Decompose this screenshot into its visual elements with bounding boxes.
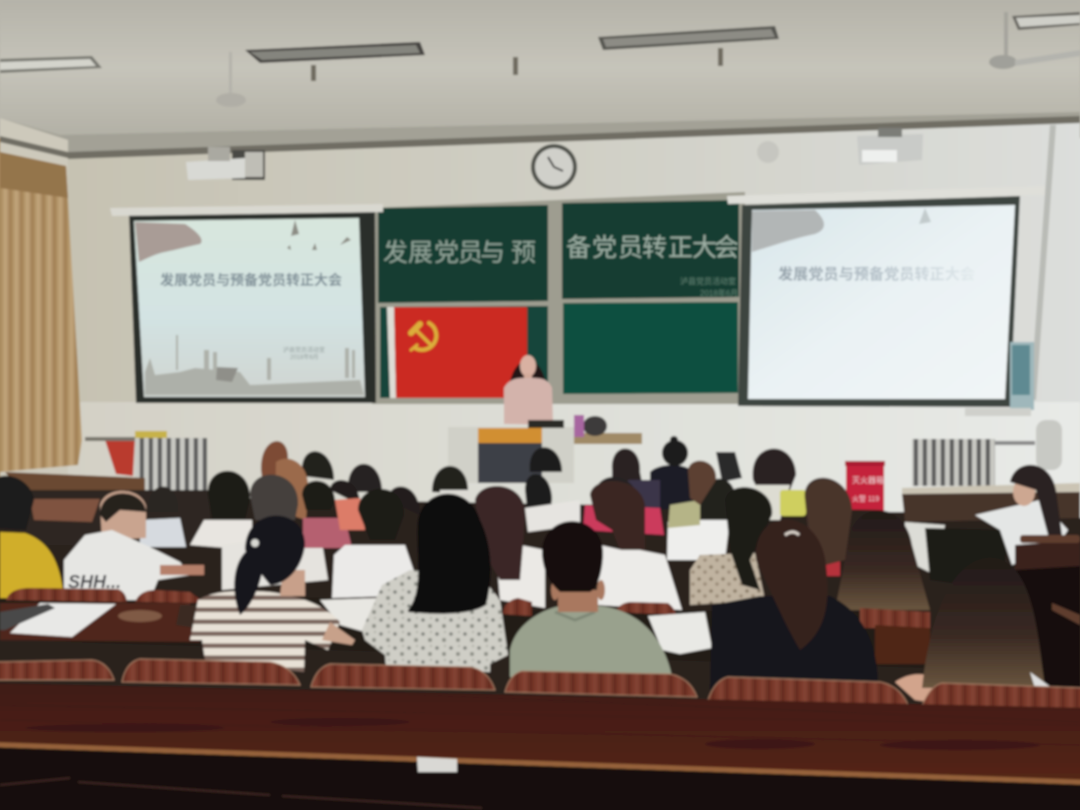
hammer and sickle emblem — [411, 323, 436, 350]
open book right — [648, 612, 712, 654]
cloud on screen — [135, 222, 202, 262]
party flag — [387, 307, 527, 398]
teacher — [504, 355, 553, 425]
under desk shadow — [0, 747, 1080, 810]
student: long brown hair — [820, 510, 930, 610]
fire extinguisher box — [845, 461, 885, 513]
chalkboard — [372, 192, 745, 404]
screen subtitle left: 2018年6月 — [290, 353, 319, 361]
side desks left back — [5, 472, 210, 545]
student back row 2 — [275, 436, 806, 520]
student: long hair front right — [895, 558, 1052, 705]
screen title right: 发展党员与预备党员转正大会 — [778, 265, 975, 283]
city skyline — [145, 335, 364, 395]
chalk title left: 发展党员与预 — [383, 239, 536, 267]
right projection screen — [738, 196, 1020, 407]
student: long black hair white shirt — [475, 486, 545, 608]
chalk note: 2018年6月 — [700, 288, 738, 298]
projector left — [186, 147, 265, 180]
birds on screen — [287, 220, 351, 250]
curtain — [0, 152, 82, 472]
bag on lectern — [574, 415, 607, 437]
student: floral blouse long hair — [362, 494, 508, 672]
student: right side white shirt — [975, 465, 1068, 565]
shirt print: SHH... — [68, 572, 121, 592]
front row chair backs — [0, 659, 1080, 710]
paper on desk — [10, 603, 116, 637]
side desk right front — [1015, 535, 1080, 690]
back wall — [0, 118, 1080, 512]
chalk title right: 备党员转正大会 — [566, 234, 739, 262]
chalk note: 泸县党员活动室 — [680, 276, 736, 286]
projector right — [857, 128, 923, 165]
lectern — [448, 415, 642, 483]
wall pipe — [0, 116, 1080, 470]
student: white shirt — [332, 489, 422, 598]
open book left — [320, 598, 378, 632]
student: white shirt ponytail — [590, 481, 682, 610]
left radiator — [85, 431, 207, 494]
student back row 3 — [140, 471, 420, 590]
back rows of students — [140, 436, 852, 590]
student: floral off-shoulder — [690, 487, 772, 605]
fire extinguisher box: 灭火器箱 — [852, 475, 884, 485]
screen top casings — [110, 186, 1045, 216]
wall clock — [531, 144, 577, 190]
screen title left: 发展党员与预备党员转正大会 — [160, 272, 342, 288]
front desk — [0, 683, 1080, 785]
student back row 1 — [261, 441, 470, 508]
ceiling lights — [0, 12, 1080, 81]
student: striped shirt ponytail — [190, 516, 355, 672]
second desk row back — [0, 596, 930, 668]
student: yellow shirt — [0, 476, 63, 598]
dark seating backdrop — [0, 492, 1080, 810]
student: SHH shirt — [64, 491, 204, 600]
screen subtitle left: 泸县党员活动室 — [283, 346, 325, 354]
ceiling fans — [216, 12, 1080, 107]
student: grey-green shirt — [510, 521, 672, 677]
student: dark top long brown hair — [710, 519, 878, 690]
chalk note — [680, 276, 738, 298]
fire extinguisher box: 火警 119 — [852, 494, 879, 503]
student back row 4 — [525, 461, 852, 565]
middle desks — [0, 598, 930, 664]
wall outlet — [757, 141, 779, 163]
side desks right back — [902, 483, 1080, 590]
student: brown hair mid — [805, 480, 852, 565]
middle row chairs — [6, 588, 930, 628]
wall box right — [965, 342, 1034, 416]
right radiator — [912, 439, 1035, 486]
screen subtitle left — [283, 346, 325, 361]
left projection screen — [129, 211, 376, 403]
ceiling — [0, 0, 1080, 160]
